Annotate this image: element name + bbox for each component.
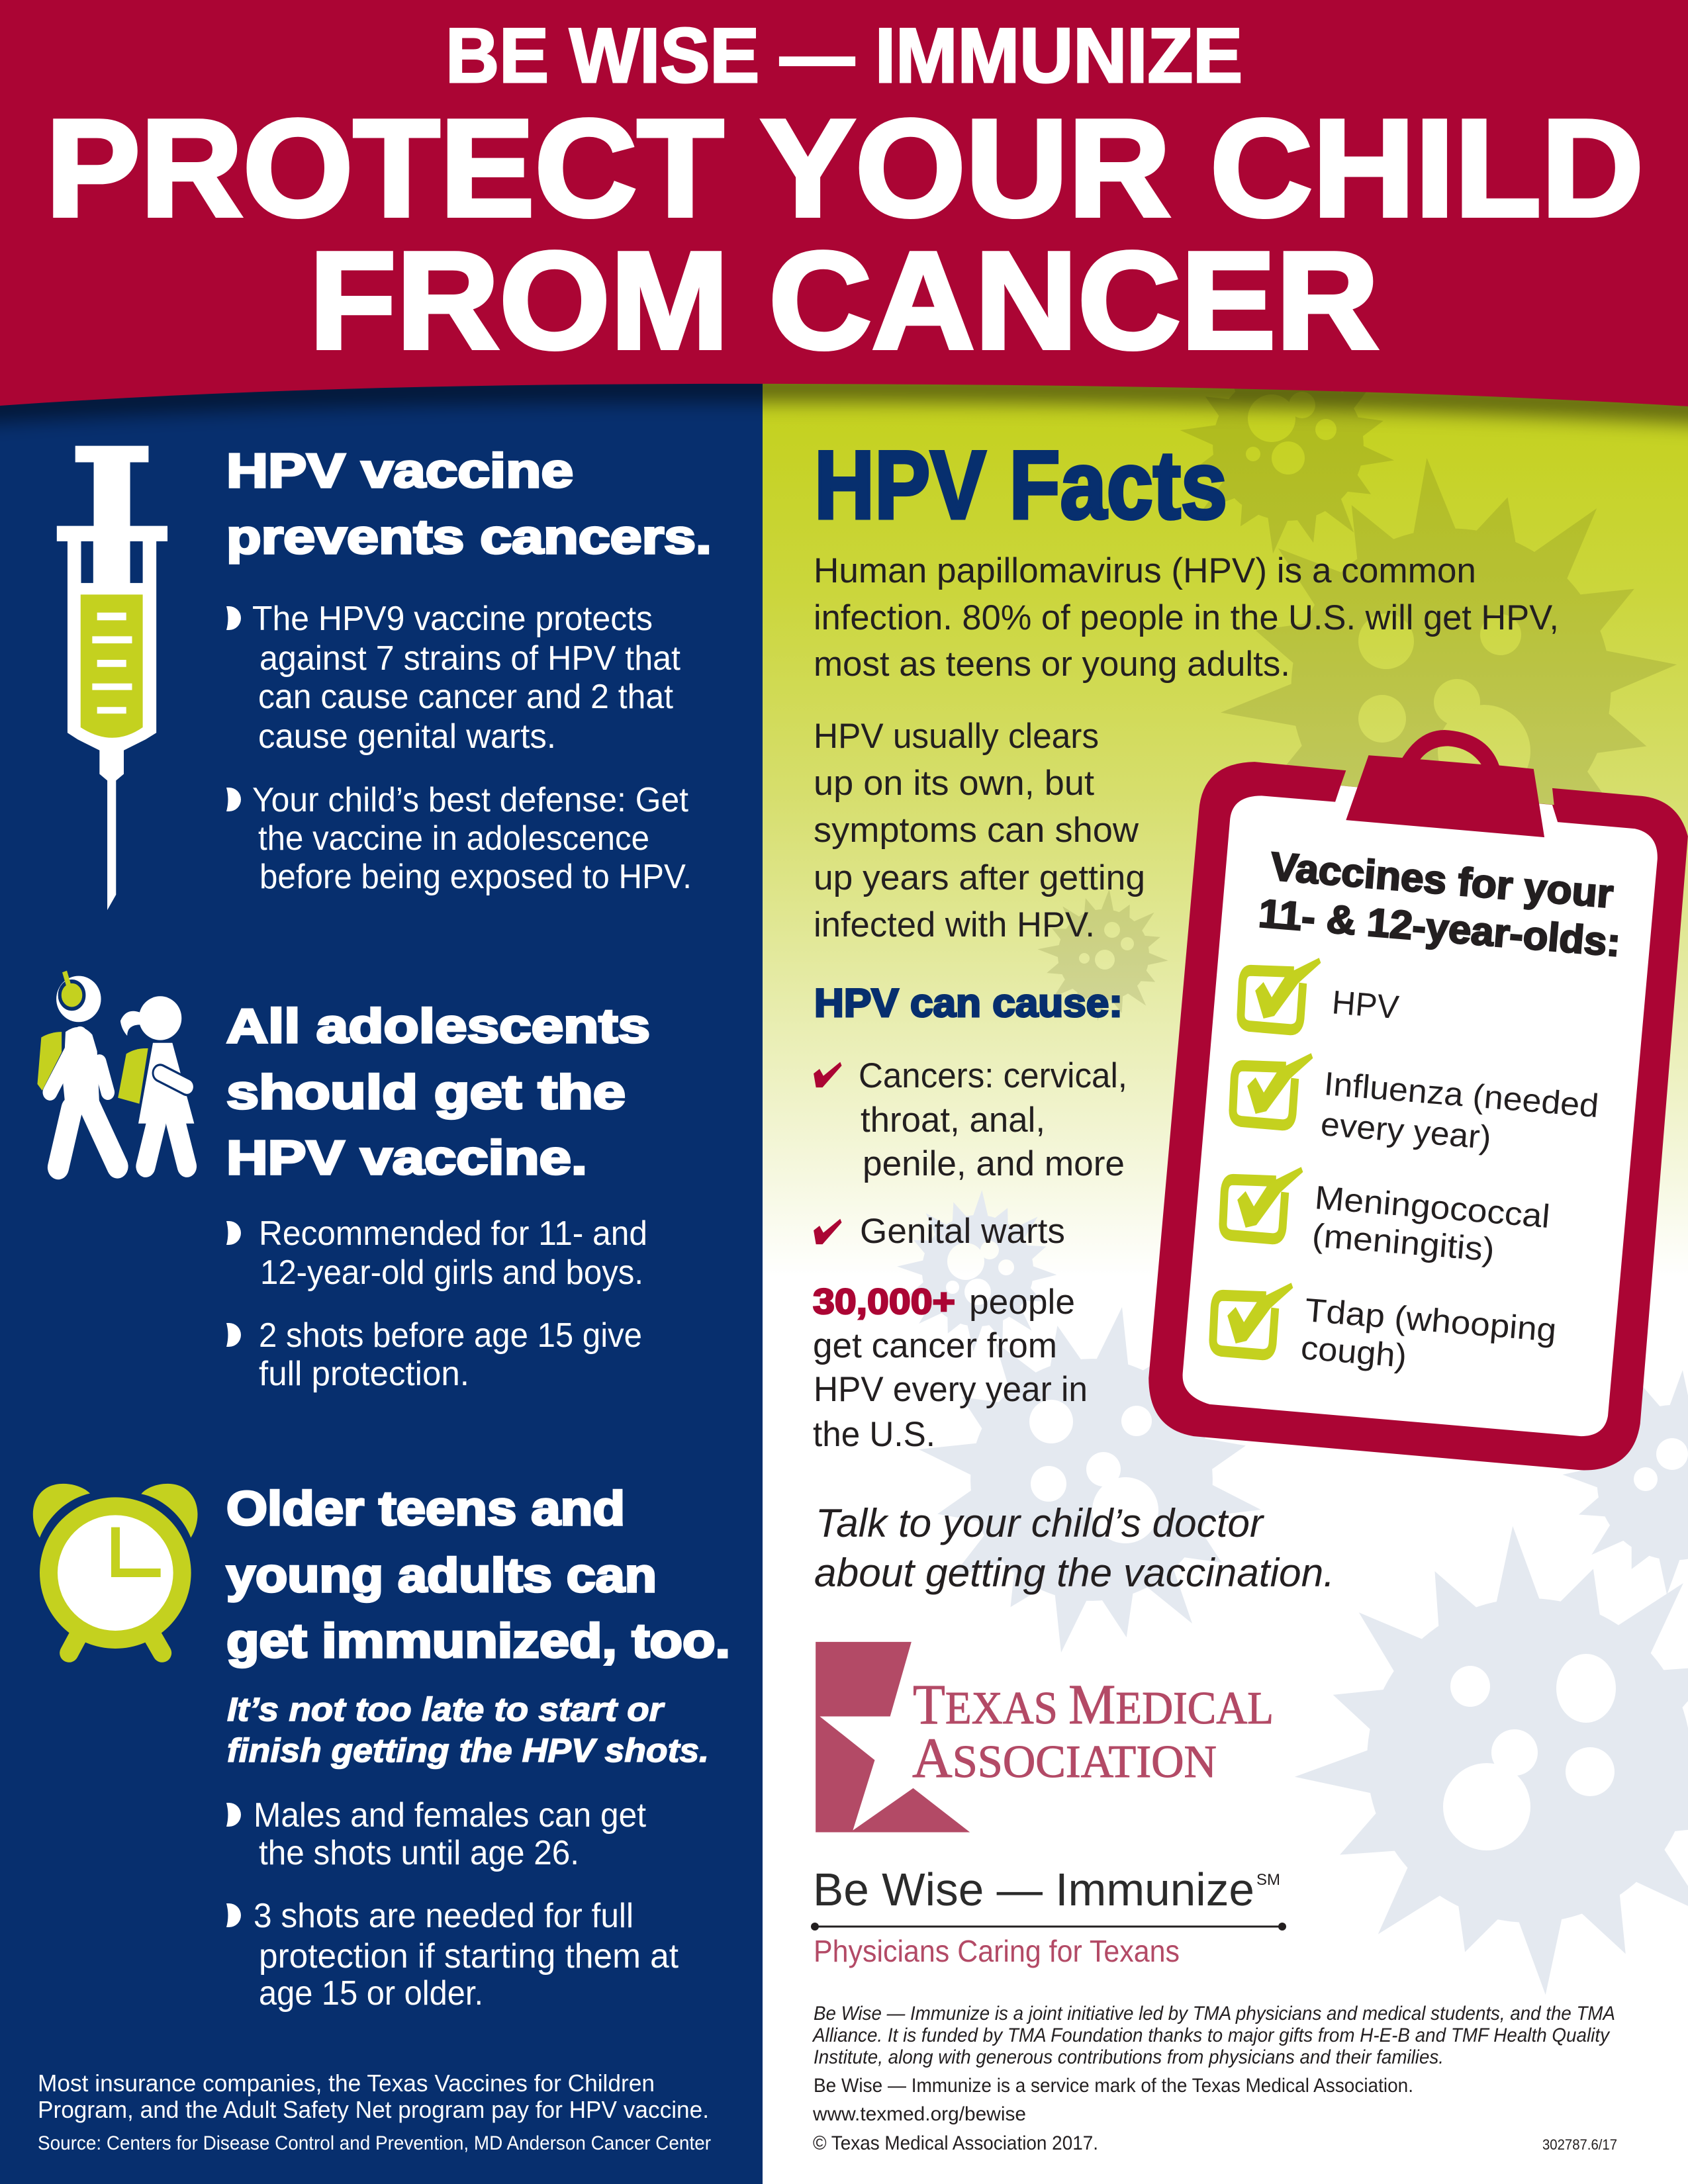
logo: Texas Medical Association [816,1642,1274,1833]
banner shadow [0,387,1688,410]
logo wordmark [912,1672,1274,1790]
text: Tdap: Tdap (whooping [1303,1291,1558,1349]
text block: fine print: www.texmed.org/bewise [812,2103,1026,2125]
heading: HPV vaccine prevents cancers: HPV vaccine [226,445,573,498]
text block: 30,000+ statistic: 30,000+ [813,1282,955,1322]
text block: insurance note and source: Most insurance companies, the Texas Vaccines for Children [38,2070,655,2097]
text block: older teens bullets: Males and females can get [254,1796,647,1835]
title [46,91,1644,378]
icon: virus, mid grey [888,1277,1291,1682]
clipboard body [1149,762,1688,1470]
heading: HPV vaccine prevents cancers: prevents cancers. [226,511,712,564]
heading: all adolescents [226,1000,650,1185]
title kicker: BE WISE — IMMUNIZE [445,12,1243,99]
text block: cancers list: penile, and more [863,1144,1125,1183]
icon: virus, middle small lime [1032,884,1174,1026]
icon: virus, large grey bottom right [1278,1510,1688,2011]
panel: navy background, left column [0,371,763,2184]
heading: HPV vaccine prevents cancers [226,445,712,564]
text block: 30,000+ statistic: people [969,1283,1075,1322]
text: meningococcal: Meningococcal [1313,1179,1551,1235]
callout: talk to your doctor: about getting the vaccination. [814,1551,1335,1595]
heading: all adolescents: HPV vaccine. [226,1132,587,1185]
text block: HPV9 bullets: Your child’s best defense: Get [252,781,689,819]
callout: not too late [227,1691,709,1769]
clipboard title [1257,844,1622,965]
icon: two students with backpacks [37,972,194,1167]
heading: all adolescents: All adolescents [226,1000,650,1053]
text block: fine print: 302787.6/17 [1542,2136,1617,2153]
text block: fine print: Alliance. It is funded by TMA Foundation thanks to major gifts from H-E-B and TMF Health Quality [812,2025,1611,2046]
text block: HPV9 bullets: before being exposed to HPV. [259,858,692,896]
logo wordmark: TEXAS MEDICAL [913,1672,1274,1736]
text block: HPV9 bullets: the vaccine in adolescence [258,819,649,858]
logo wordmark: ASSOCIATION [912,1726,1217,1790]
text block: insurance note and source: Source: Centers for Disease Control and Prevention, MD Anderson Cancer Center [38,2132,711,2154]
text: Tdap [1299,1291,1558,1375]
checkbox: influenza [1233,1053,1313,1125]
text block: cancers list [859,1056,1127,1183]
text block: HPV intro: most as teens or young adults. [814,645,1290,684]
text block: HPV intro: infection. 80% of people in the U.S. will get HPV, [814,598,1559,637]
text: influenza: Influenza (needed [1323,1065,1600,1124]
heading: HPV can cause: HPV can cause: [814,981,1123,1025]
heading: older teens: young adults can [226,1549,657,1602]
panel: clipboard [1149,730,1688,1470]
text: HPV: HPV [1331,983,1401,1026]
text block: HPV9 bullets: can cause cancer and 2 that [258,678,674,716]
text: genital warts: Genital warts [860,1212,1065,1251]
text block: recommended bullets: 2 shots before age 15 give [259,1316,642,1355]
title: PROTECT YOUR CHILD [46,91,1644,246]
callout: talk to your doctor: Talk to your child’s doctor [816,1501,1264,1545]
text block: 30,000+ statistic: HPV every year in [814,1370,1088,1409]
text block: HPV9 bullets: against 7 strains of HPV that [259,639,681,678]
text block: recommended bullets: Recommended for 11- and [259,1214,647,1253]
text block: HPV9 bullets: The HPV9 vaccine protects [252,600,653,638]
icon: virus, upper large [1196,434,1688,943]
icon: red check, warts [814,1219,842,1244]
text block: HPV clears on its own [814,717,1145,944]
title: FROM CANCER [309,224,1379,378]
text block: recommended bullets: 12-year-old girls and boys. [260,1253,643,1292]
heading: older teens: get immunized, too. [226,1615,730,1668]
text block: older teens bullets [226,1796,679,2013]
text: Be Wise Immunize tagline [811,1864,1286,1968]
text block: fine print: Be Wise — Immunize is a service mark of the Texas Medical Association. [814,2075,1413,2097]
callout: not too late: finish getting the HPV shots. [227,1732,709,1769]
icon: virus, small grey [893,1186,1061,1355]
text block: fine print [812,2003,1617,2154]
clipboard title: 11- & 12-year-olds: [1257,891,1622,965]
text block: recommended bullets: full protection. [259,1355,469,1393]
text block: fine print: Be Wise — Immunize is a joint initiative led by TMA physicians and medical students, and the TMA [814,2003,1615,2025]
text block: HPV clears on its own: symptoms can show [814,811,1139,850]
heading: older teens [226,1482,730,1668]
text block: 30,000+ statistic: the U.S. [813,1415,935,1454]
text: Be Wise Immunize tagline: Be Wise — Immunize [813,1864,1254,1915]
logo star mark [816,1642,970,1833]
text block: cancers list: Cancers: cervical, [859,1056,1127,1095]
text block: HPV intro: Human papillomavirus (HPV) is a common [814,551,1476,590]
text block: older teens bullets: the shots until age 26. [259,1834,579,1872]
panel: red title banner [0,0,1688,406]
text: Be Wise Immunize tagline: Physicians Caring for Texans [814,1934,1180,1968]
text block: HPV clears on its own: up on its own, but [814,764,1094,803]
text block: fine print: © Texas Medical Association 2017. [813,2132,1098,2154]
icon: virus, right edge grey [1555,1363,1688,1602]
icon: virus, upper small [1165,322,1409,569]
text block: older teens bullets: 3 shots are needed for full [254,1897,633,1935]
text: meningococcal: (meningitis) [1311,1216,1496,1269]
icon: red check, cancers [814,1062,842,1087]
checkbox: Tdap [1213,1283,1293,1355]
text: Tdap: cough) [1299,1329,1408,1375]
callout: not too late: It’s not too late to start or [227,1691,665,1728]
checkbox: HPV [1241,958,1321,1030]
clipboard clip [1346,730,1544,837]
panel: lime and white background, right column [763,371,1688,2184]
clipboard paper [1183,786,1658,1436]
text block: HPV clears on its own: infected with HPV. [814,905,1095,944]
text block: recommended bullets [226,1214,647,1393]
text block: older teens bullets: protection if starting them at [259,1937,679,1976]
text block: HPV clears on its own: up years after getting [814,858,1145,897]
text block: HPV9 bullets: cause genital warts. [258,717,556,756]
text block: cancers list: throat, anal, [861,1101,1045,1140]
text block: HPV clears on its own: HPV usually clears [814,717,1099,756]
text block: insurance note and source [38,2070,711,2154]
text: meningococcal [1311,1179,1551,1269]
text: influenza [1319,1065,1600,1156]
text: influenza: every year) [1319,1105,1493,1156]
text block: HPV intro [814,551,1559,684]
clipboard title: Vaccines for your [1269,844,1615,916]
text block: HPV9 bullets [226,600,692,896]
text block: older teens bullets: age 15 or older. [259,1974,483,2013]
text block: 30,000+ statistic: get cancer from [813,1326,1057,1365]
heading: older teens: Older teens and [226,1482,625,1535]
heading: all adolescents: should get the [226,1066,626,1119]
text block: fine print: Institute, along with generous contributions from physicians and their families. [814,2046,1444,2068]
text block: 30,000+ statistic [813,1282,1088,1454]
checkbox: meningococcal [1223,1167,1303,1239]
text: Be Wise Immunize tagline: SM [1256,1871,1280,1889]
icon: alarm clock [33,1484,197,1653]
icon: syringe [57,446,167,910]
text block: insurance note and source: Program, and the Adult Safety Net program pay for HPV vaccine. [38,2096,709,2123]
heading: HPV Facts: HPV Facts [814,431,1227,539]
callout: talk to your doctor [814,1501,1335,1595]
